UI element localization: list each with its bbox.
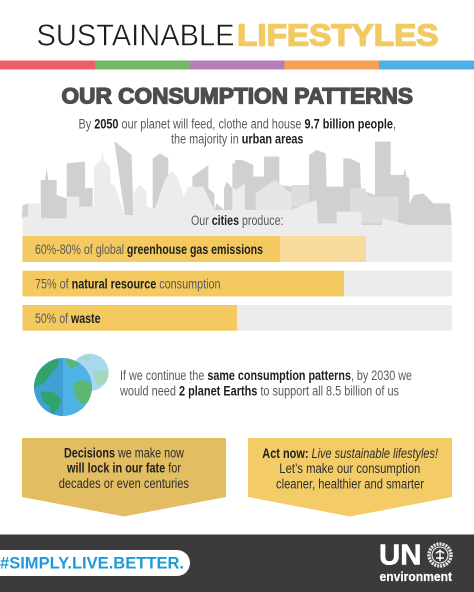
bar: natural resources [22,271,452,296]
title: LIFESTYLES [237,18,438,52]
icon: two planet earths [33,354,109,416]
heading: OUR CONSUMPTION PATTERNS [62,84,413,108]
bar: waste: 50% of waste [35,311,101,326]
callout: decisions: decades or even centuries [59,476,189,491]
callout: decisions [22,438,226,516]
callout: decisions: Decisions we make now [64,446,184,460]
UN environment logo: environment [380,569,453,584]
title: SUSTAINABLE [36,18,234,52]
bar: greenhouse gas: 60%-80% of global greenhouse gas emissions [35,242,263,257]
intro text [78,117,396,147]
callout: decisions: will lock in our fate for [66,460,181,476]
colour stripe [0,60,474,70]
callout: act now: cleaner, healthier and smarter [276,476,424,492]
bar: waste [22,305,452,331]
UN environment logo: UN [379,540,422,572]
callout: act now [248,438,452,516]
city skyline [22,141,452,238]
planet text: If we continue the same consumption patterns, by 2030 we [120,368,412,383]
intro text: the majority in urban areas [171,132,304,147]
callout: act now: Let’s make our consumption [279,461,420,476]
callout: act now: Act now: Live sustainable lifestyles! [262,446,438,461]
planet text [119,368,412,398]
cities caption: Our cities produce: [191,213,284,228]
UN environment logo [379,540,453,584]
footer band [0,534,474,592]
bar: natural resources: 75% of natural resource consumption [35,277,221,292]
planet text: would need 2 planet Earths to support all 8.5 billion of us [119,383,399,398]
intro text: By 2050 our planet will feed, clothe and house 9.7 billion people, [78,117,396,132]
hashtag pill: #SIMPLY.LIVE.BETTER. [0,554,184,572]
title [36,18,438,52]
bar: greenhouse gas [22,236,452,262]
